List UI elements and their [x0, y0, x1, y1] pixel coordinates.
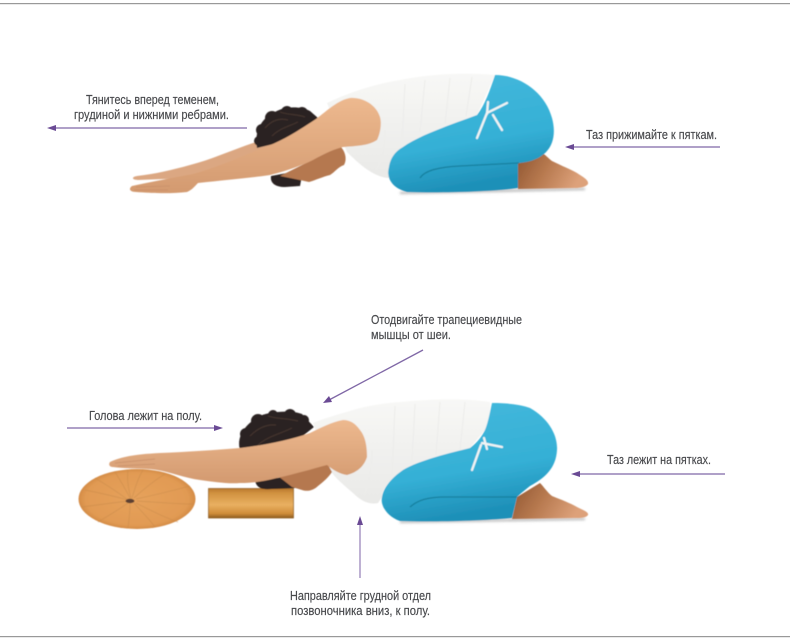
arrow: pelvis on heels — [571, 471, 725, 477]
text: move trapezius from neck: мышцы от шеи. — [371, 328, 451, 342]
pants — [388, 75, 554, 192]
text: move trapezius from neck: Отодвигайте трапециевидные — [371, 313, 522, 327]
ground shadow — [400, 189, 585, 193]
text: thoracic spine down: Направляйте грудной отдел — [290, 589, 431, 603]
bolster — [78, 469, 196, 529]
foot — [512, 483, 588, 519]
text: head on floor: Голова лежит на полу. — [89, 409, 202, 423]
text: thoracic spine down — [290, 589, 431, 618]
fingers — [115, 459, 155, 466]
foot — [518, 152, 588, 189]
hair — [254, 106, 318, 148]
face — [280, 146, 346, 182]
text: press pelvis to heels: Таз прижимайте к пяткам. — [586, 128, 717, 142]
pants crease — [420, 163, 519, 178]
fingers — [134, 186, 170, 190]
shirt — [327, 74, 495, 178]
arrow: trapezius — [323, 350, 423, 403]
drawstring — [477, 102, 507, 138]
ground shadow — [400, 519, 585, 522]
top border line — [0, 3, 790, 4]
face — [278, 463, 332, 491]
text: stretch forward: грудиной и нижними ребрами. — [74, 108, 229, 122]
drawstring — [472, 438, 502, 470]
shirt — [313, 399, 490, 503]
arms — [109, 420, 367, 483]
figure: child's pose stretching forward — [130, 74, 588, 193]
bottom border line — [0, 636, 790, 637]
text: stretch forward: Тянитесь вперед теменем, — [86, 93, 219, 107]
hair under chin — [271, 170, 303, 187]
arrow: thoracic spine down — [357, 516, 363, 578]
far arm — [133, 125, 300, 180]
figure: supported child's pose with bolster and block — [78, 399, 588, 529]
shirt folds — [376, 77, 472, 170]
hair — [239, 409, 314, 458]
block — [208, 488, 294, 518]
near arm — [130, 98, 381, 193]
arrow: press pelvis to heels — [565, 144, 720, 150]
pants — [382, 403, 557, 521]
arrow: head on floor — [67, 425, 223, 431]
pants crease — [410, 497, 517, 507]
shirt folds — [364, 402, 465, 495]
text: move trapezius from neck — [371, 313, 522, 342]
text: thoracic spine down: позвоночника вниз, к полу. — [291, 604, 430, 618]
text: pelvis on heels: Таз лежит на пятках. — [607, 453, 711, 467]
hair under arm — [255, 476, 296, 489]
arrow: stretch forward — [47, 125, 247, 131]
text: stretch forward — [74, 93, 229, 122]
